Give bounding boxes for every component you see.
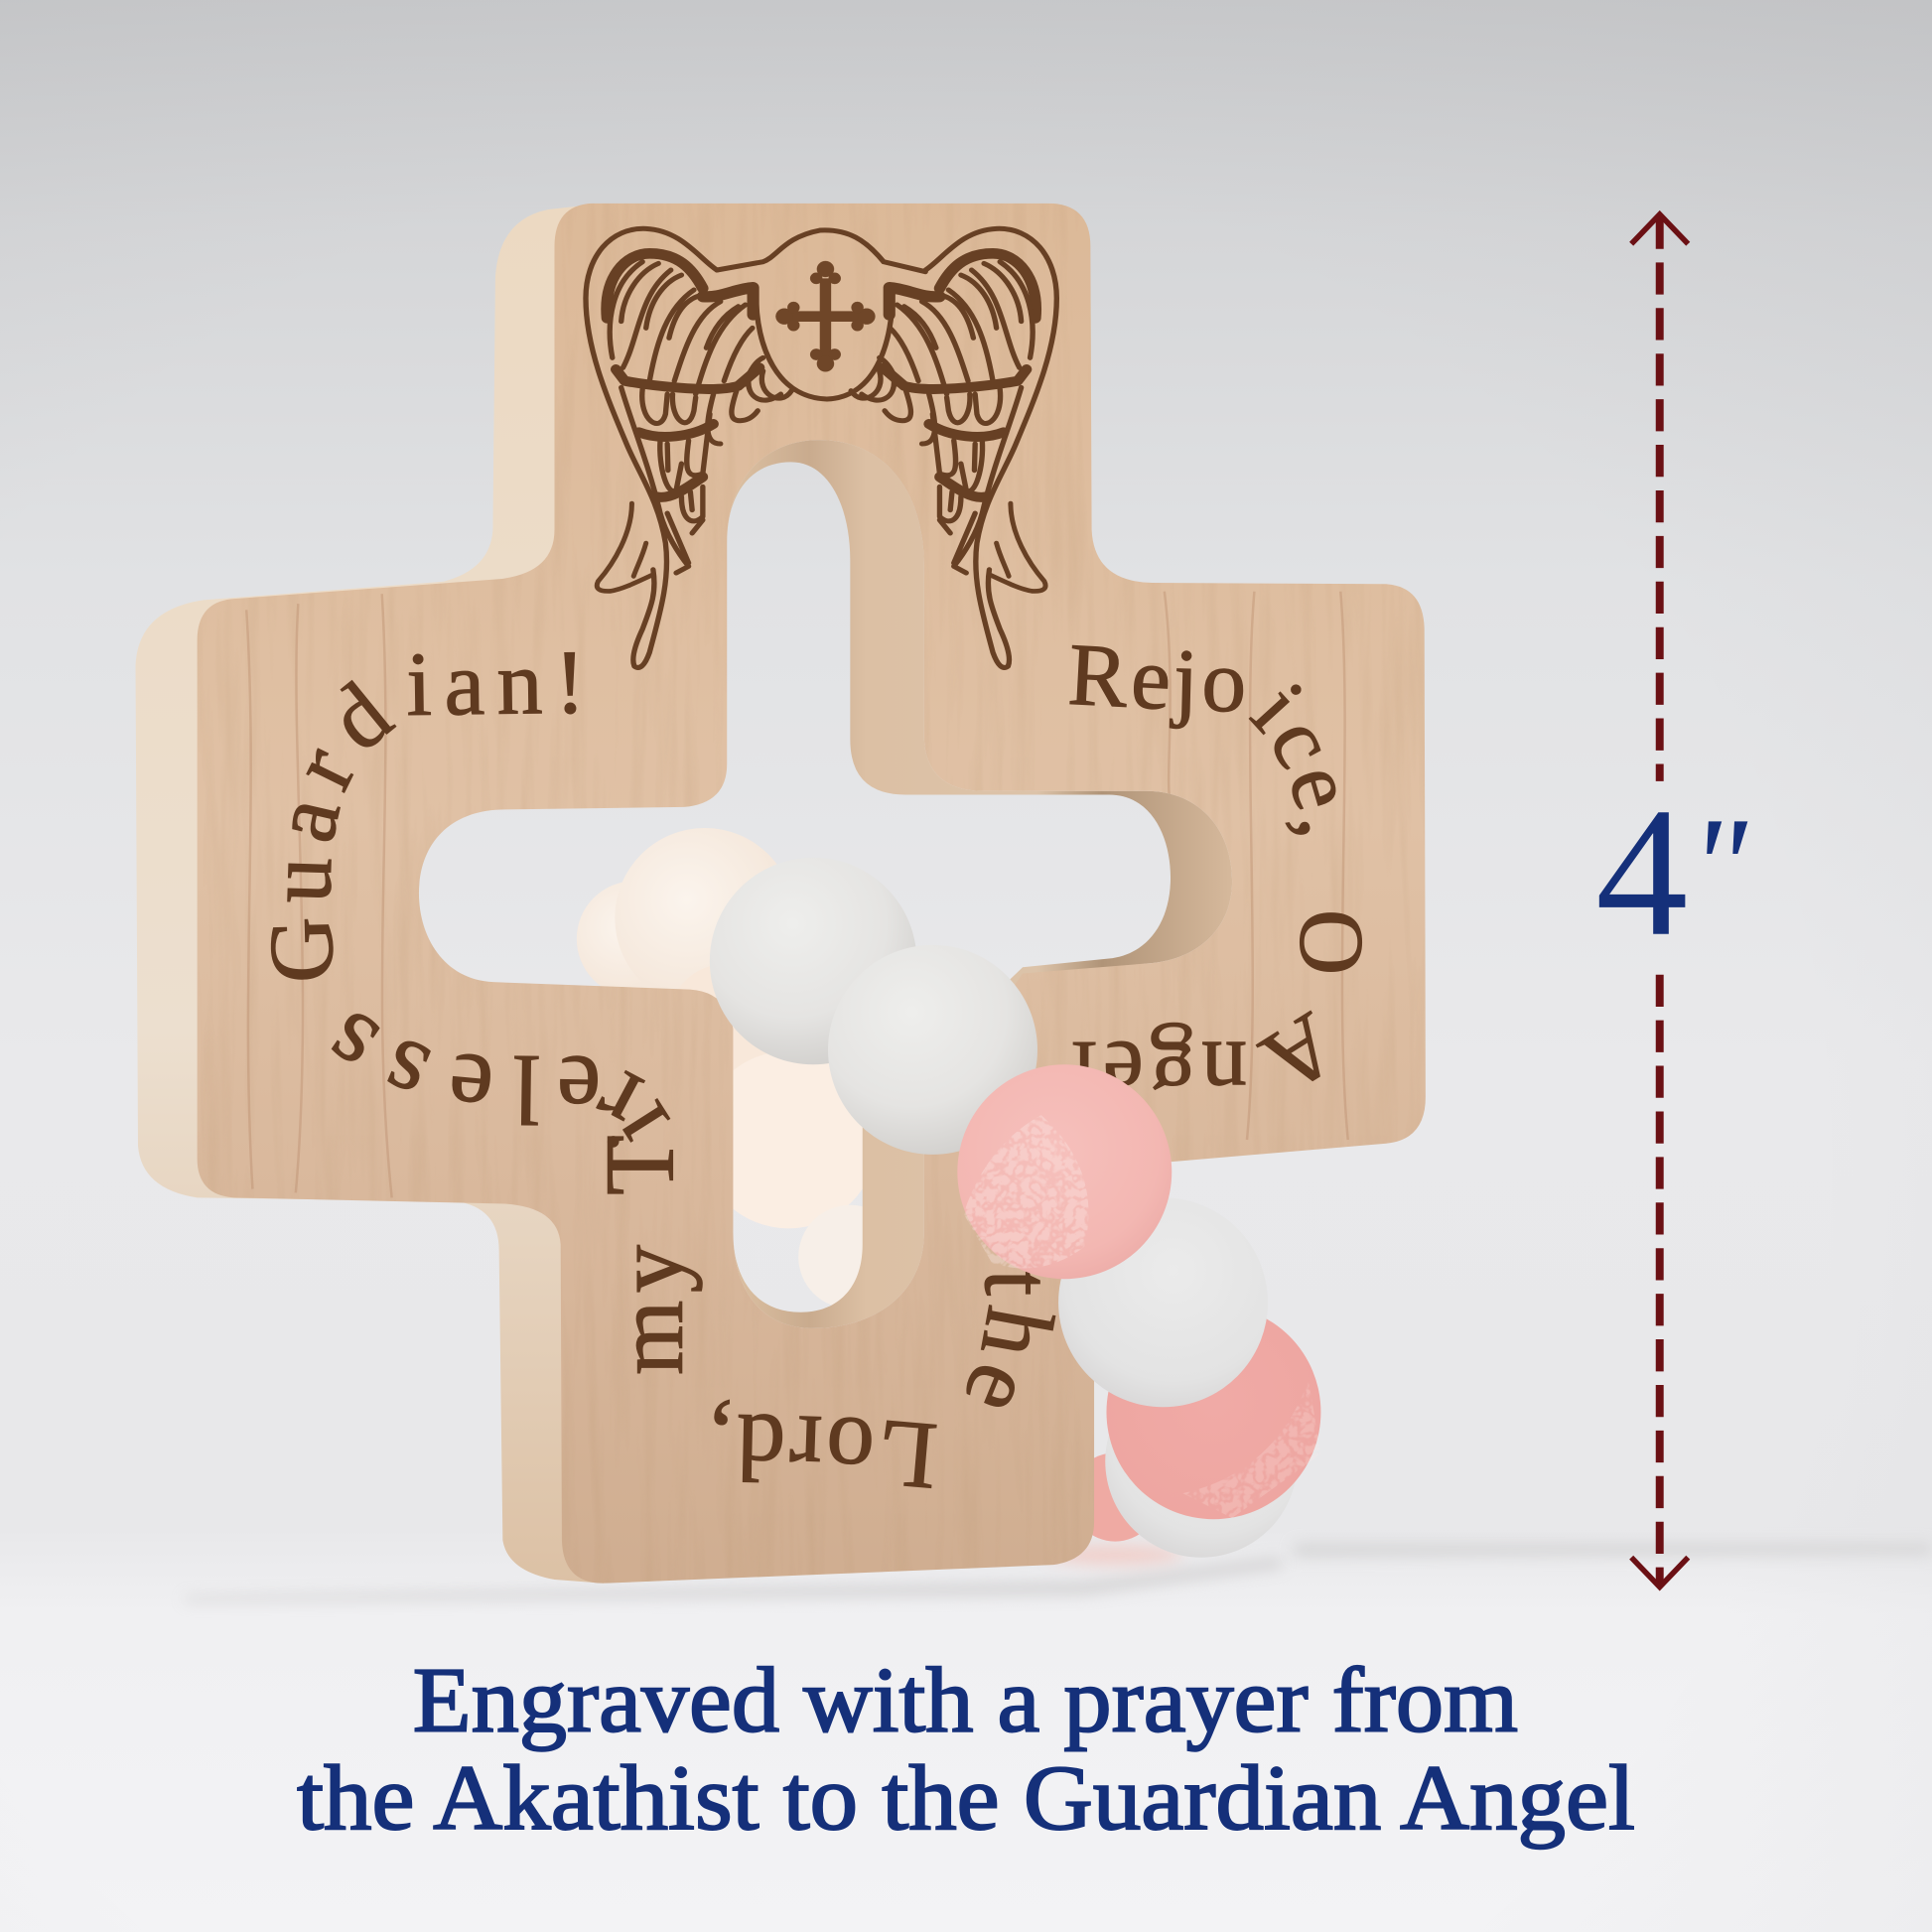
engraved prayer text: Tireless <box>332 1014 673 1194</box>
engraved prayer text: my <box>635 1245 703 1374</box>
caption: Engraved with a prayer from <box>413 1650 1518 1752</box>
engraved prayer text: the <box>966 1271 1056 1407</box>
height dimension arrow <box>1631 214 1688 1587</box>
icon: angel wings with cross <box>586 228 1056 667</box>
dark pink bead <box>1106 1318 1320 1519</box>
caption: the Akathist to the Guardian Angel <box>297 1747 1635 1850</box>
engraved prayer text <box>270 645 1362 1489</box>
medallion outline <box>717 230 925 399</box>
height label <box>1595 770 1748 975</box>
engraved prayer text: Angel <box>1072 1011 1320 1090</box>
engraved prayer text: Guardian! <box>270 651 576 980</box>
height label: " <box>1690 789 1748 942</box>
floor shadow <box>185 1544 1932 1601</box>
inner walls of cross-shaped opening <box>419 440 1232 1328</box>
caption <box>297 1650 1635 1850</box>
small cross <box>775 261 875 371</box>
pink bead <box>949 1064 1172 1294</box>
left wing <box>586 228 791 667</box>
silicone beads in front of the cross <box>710 858 1330 1528</box>
cross front face <box>197 203 1426 1584</box>
cross side edge <box>136 204 604 1584</box>
right wing <box>851 228 1056 667</box>
engraved prayer text: Rejoice, <box>1069 645 1336 835</box>
beads behind the cross <box>577 828 1298 1558</box>
engraved prayer text: Lord, <box>714 1400 937 1489</box>
height label: 4 <box>1595 770 1688 975</box>
engraved prayer text: O <box>1299 912 1362 972</box>
